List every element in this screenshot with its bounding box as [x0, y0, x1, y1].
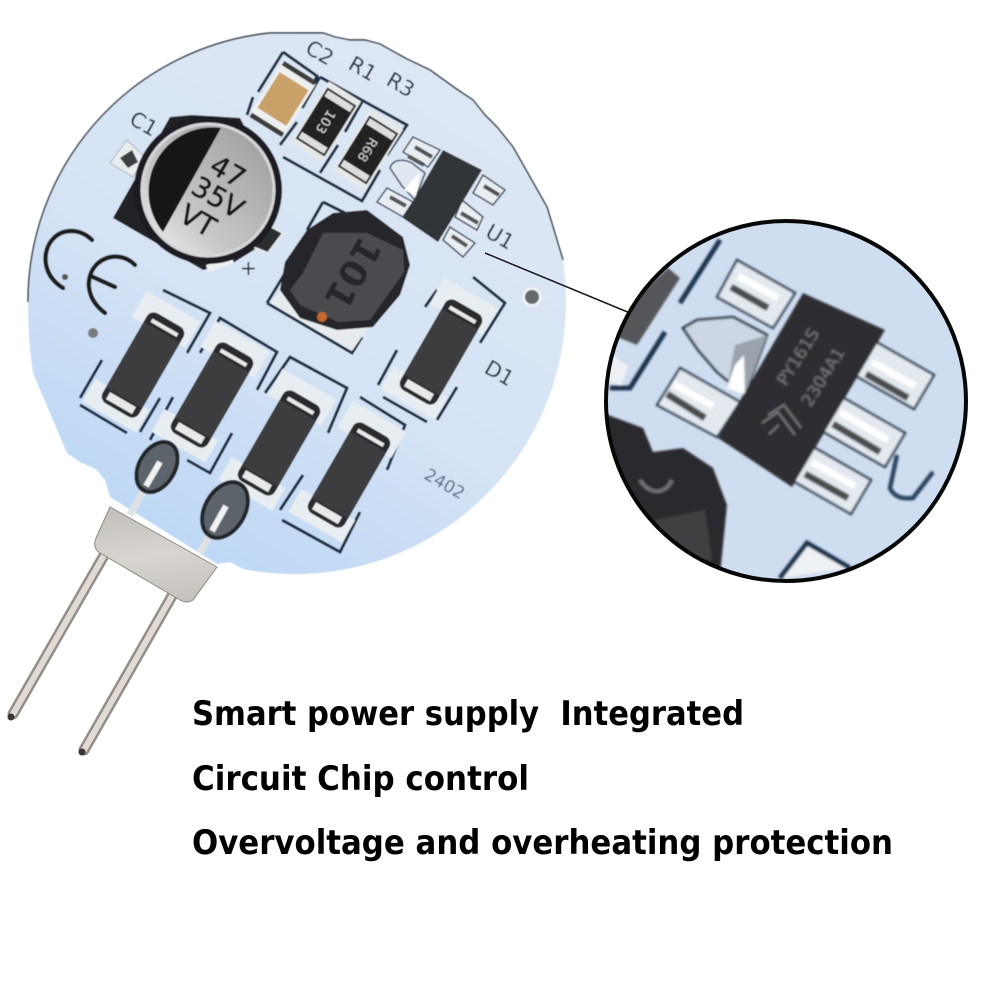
line 2: Circuit Chip control — [192, 759, 529, 799]
zoomed chip markings: PY161S — [773, 325, 824, 390]
zoomed neighbouring resistor — [612, 268, 680, 345]
silkscreen labels: U1 — [482, 220, 518, 255]
leader line — [485, 253, 630, 313]
silkscreen labels: C2 — [302, 36, 338, 70]
diode 4 — [289, 401, 406, 543]
zoomed trace and bright solder — [683, 317, 767, 395]
connector base — [95, 507, 217, 602]
diode D1 — [381, 278, 498, 420]
feature text — [192, 694, 893, 863]
diode 1 — [83, 291, 200, 433]
resistor R1 — [291, 81, 361, 163]
zoomed lower pad outline — [780, 543, 850, 578]
connector pins — [8, 552, 172, 756]
zoomed capacitor — [608, 413, 729, 567]
capacitor C2 — [249, 60, 317, 138]
zoomed U1 label — [890, 455, 933, 498]
diode 3 — [219, 369, 336, 511]
solder joints — [128, 435, 257, 553]
resistor R3: R68 — [354, 134, 380, 164]
silkscreen labels: D1 — [480, 356, 518, 391]
zoomed chip body — [718, 293, 885, 487]
electrolytic capacitor C1 — [110, 115, 283, 272]
circuit board — [28, 33, 566, 574]
diode 2 — [152, 321, 269, 463]
silkscreen outlines — [80, 52, 505, 552]
resistor R3 — [333, 109, 403, 191]
silkscreen labels: 2402 — [420, 465, 468, 504]
zoomed pads — [657, 260, 934, 514]
line 1: Smart power supply Integrated — [192, 694, 744, 734]
inductor — [270, 210, 410, 351]
silkscreen labels — [126, 36, 518, 504]
CE mark — [46, 231, 135, 313]
silkscreen labels: C1 — [126, 107, 162, 141]
line 3: Overvoltage and overheating protection — [192, 823, 893, 863]
chip U1 — [377, 137, 505, 257]
silkscreen labels: R3 — [382, 68, 419, 102]
resistor R1: 103 — [312, 107, 338, 136]
electrolytic capacitor C1: VT — [174, 197, 222, 245]
magnified chip callout: 2304A1 — [798, 344, 850, 411]
board holes — [62, 274, 542, 338]
silkscreen labels: + — [240, 256, 257, 280]
magnified chip callout — [590, 221, 966, 600]
electrolytic capacitor C1: 47 — [204, 149, 251, 195]
electrolytic capacitor C1: 35V — [186, 170, 250, 226]
inductor: 101 — [315, 230, 389, 316]
silkscreen labels: R1 — [344, 52, 381, 86]
